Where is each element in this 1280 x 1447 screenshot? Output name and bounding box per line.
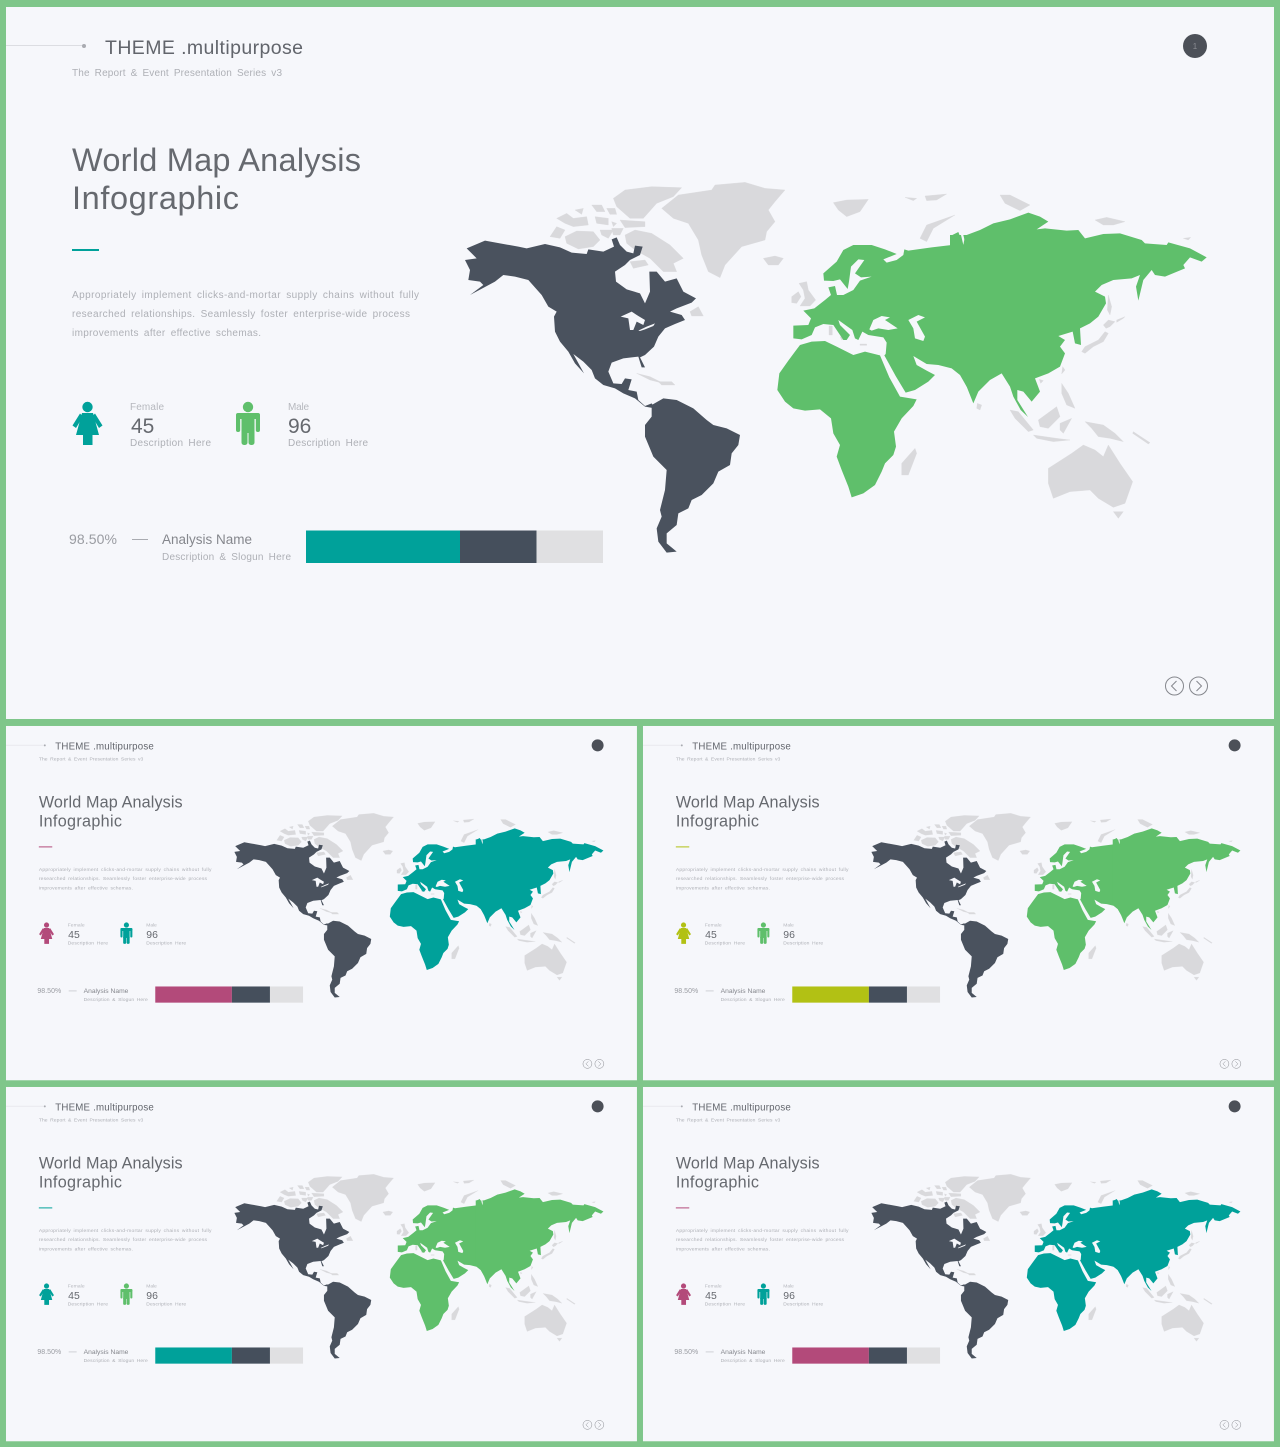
page number badge: [1183, 34, 1207, 58]
header brand: THEME .multipurpose: [692, 741, 791, 752]
navigation arrows: [583, 1420, 604, 1429]
analysis label: Description & Slogun Here: [162, 552, 291, 563]
description paragraph: improvements after effective schemas.: [676, 1247, 770, 1253]
panel: slide variant magenta teal second: [643, 1087, 1274, 1441]
title: [676, 1155, 820, 1191]
description paragraph: improvements after effective schemas.: [676, 886, 770, 892]
stat: female: 45: [68, 1291, 80, 1302]
description paragraph: researched relationships. Seamlessly foster enterprise-wide process: [39, 876, 208, 882]
stat: female: [72, 402, 211, 449]
stat: female: 45: [705, 930, 717, 941]
accent line: [676, 1206, 689, 1209]
accent line: [72, 249, 99, 251]
navigation arrows: [1220, 1059, 1241, 1068]
stacked bar: [155, 1347, 303, 1364]
stat: female: 45: [131, 415, 154, 438]
title: World Map Analysis: [39, 1155, 183, 1173]
title: World Map Analysis: [72, 142, 361, 178]
analysis label: [37, 988, 148, 1003]
stat: male: Description Here: [146, 940, 186, 946]
analysis label: Analysis Name: [721, 1349, 766, 1356]
panel: slide variant teal green: [6, 1087, 637, 1441]
description paragraph: researched relationships. Seamlessly foster enterprise-wide process: [72, 309, 410, 320]
description paragraph: Appropriately implement clicks-and-mortar supply chains without fully: [39, 867, 212, 873]
analysis label: Analysis Name: [84, 988, 129, 995]
stat: male: Description Here: [146, 1301, 186, 1307]
header brand: THEME .multipurpose: [105, 37, 303, 59]
analysis label: 98.50%: [69, 531, 117, 547]
world map: [871, 1174, 1240, 1359]
panel: slide variant magenta teal: [6, 726, 637, 1080]
analysis label: Description & Slogun Here: [84, 1358, 148, 1364]
stat: female: Description Here: [705, 1301, 745, 1307]
analysis label: 98.50%: [674, 988, 698, 995]
stat: male: Male: [288, 402, 309, 413]
stat: female: Female: [130, 402, 164, 413]
header brand: THEME .multipurpose: [55, 1102, 154, 1113]
world map: [465, 182, 1207, 553]
stat: female: 45: [68, 930, 80, 941]
header brand: The Report & Event Presentation Series v3: [72, 68, 282, 79]
analysis label: [37, 1349, 148, 1364]
accent line: [676, 845, 689, 848]
description paragraph: Appropriately implement clicks-and-mortar supply chains without fully: [676, 1228, 849, 1234]
header brand: The Report & Event Presentation Series v3: [676, 756, 781, 762]
panel: slide variant olive green: [643, 726, 1274, 1080]
title: [676, 794, 820, 830]
title: [72, 142, 361, 216]
title: World Map Analysis: [39, 794, 183, 812]
page number badge: 1: [1193, 42, 1198, 51]
stat: male: [236, 402, 368, 449]
navigation arrows: [1166, 677, 1208, 695]
analysis label: Analysis Name: [721, 988, 766, 995]
analysis label: [674, 1349, 785, 1364]
header brand: [643, 741, 791, 762]
description paragraph: improvements after effective schemas.: [39, 1247, 133, 1253]
stat: female: Description Here: [130, 438, 211, 449]
description paragraph: improvements after effective schemas.: [72, 328, 261, 339]
description paragraph: [39, 867, 212, 892]
description paragraph: Appropriately implement clicks-and-mortar supply chains without fully: [39, 1228, 212, 1234]
page number badge: [592, 1100, 604, 1112]
header brand: [6, 37, 303, 79]
stat: male: 96: [783, 1291, 795, 1302]
stat: male: [757, 922, 823, 946]
stat: male: [120, 922, 186, 946]
stat: female: Description Here: [68, 1301, 108, 1307]
stat: male: 96: [288, 415, 311, 438]
stat: female: [39, 922, 108, 946]
stat: female: [676, 922, 745, 946]
header brand: The Report & Event Presentation Series v3: [676, 1117, 781, 1123]
stat: male: [120, 1283, 186, 1307]
description paragraph: Appropriately implement clicks-and-mortar supply chains without fully: [676, 867, 849, 873]
analysis label: [674, 988, 785, 1003]
title: Infographic: [676, 812, 759, 830]
analysis label: 98.50%: [37, 1349, 61, 1356]
description paragraph: improvements after effective schemas.: [39, 886, 133, 892]
stat: female: Female: [68, 1284, 85, 1290]
world map: [234, 1174, 603, 1359]
stat: male: Male: [783, 1284, 794, 1290]
stat: male: 96: [783, 930, 795, 941]
stat: female: [39, 1283, 108, 1307]
analysis label: Description & Slogun Here: [721, 1358, 785, 1364]
header brand: [6, 1102, 154, 1123]
panel: main slide: [6, 7, 1274, 719]
page number badge: [592, 739, 604, 751]
stacked bar: [792, 1347, 940, 1364]
header brand: THEME .multipurpose: [55, 741, 154, 752]
stacked bar: [155, 986, 303, 1003]
title: Infographic: [39, 1173, 122, 1191]
title: Infographic: [72, 180, 239, 216]
stat: female: Female: [705, 1284, 722, 1290]
stat: female: 45: [705, 1291, 717, 1302]
stat: male: [757, 1283, 823, 1307]
description paragraph: [72, 290, 419, 339]
stat: male: 96: [146, 930, 158, 941]
analysis label: Analysis Name: [162, 532, 252, 547]
header brand: [6, 741, 154, 762]
description paragraph: Appropriately implement clicks-and-mortar supply chains without fully: [72, 290, 419, 301]
analysis label: Description & Slogun Here: [84, 997, 148, 1003]
world map: [871, 813, 1240, 998]
description paragraph: researched relationships. Seamlessly foster enterprise-wide process: [676, 876, 845, 882]
stacked bar: [792, 986, 940, 1003]
stat: male: Male: [146, 1284, 157, 1290]
header brand: The Report & Event Presentation Series v3: [39, 756, 144, 762]
header brand: [643, 1102, 791, 1123]
title: World Map Analysis: [676, 794, 820, 812]
accent line: [39, 1206, 52, 1209]
analysis label: 98.50%: [37, 988, 61, 995]
stat: male: Male: [783, 923, 794, 929]
stat: male: Description Here: [783, 1301, 823, 1307]
analysis label: 98.50%: [674, 1349, 698, 1356]
page number badge: [1229, 1100, 1241, 1112]
description paragraph: researched relationships. Seamlessly foster enterprise-wide process: [676, 1237, 845, 1243]
analysis label: [69, 531, 291, 563]
title: [39, 1155, 183, 1191]
stat: female: [676, 1283, 745, 1307]
page number badge: [1229, 739, 1241, 751]
title: Infographic: [39, 812, 122, 830]
title: World Map Analysis: [676, 1155, 820, 1173]
stacked bar: [306, 530, 603, 563]
accent line: [39, 845, 52, 848]
stat: female: Description Here: [705, 940, 745, 946]
stat: male: Description Here: [783, 940, 823, 946]
stat: male: 96: [146, 1291, 158, 1302]
stat: female: Female: [705, 923, 722, 929]
analysis label: Description & Slogun Here: [721, 997, 785, 1003]
stat: male: Description Here: [288, 438, 368, 449]
description paragraph: [676, 867, 849, 892]
navigation arrows: [1220, 1420, 1241, 1429]
stat: female: Description Here: [68, 940, 108, 946]
header brand: THEME .multipurpose: [692, 1102, 791, 1113]
title: [39, 794, 183, 830]
navigation arrows: [583, 1059, 604, 1068]
world map: [234, 813, 603, 998]
stat: male: Male: [146, 923, 157, 929]
description paragraph: researched relationships. Seamlessly foster enterprise-wide process: [39, 1237, 208, 1243]
stat: female: Female: [68, 923, 85, 929]
title: Infographic: [676, 1173, 759, 1191]
description paragraph: [39, 1228, 212, 1253]
header brand: The Report & Event Presentation Series v3: [39, 1117, 144, 1123]
description paragraph: [676, 1228, 849, 1253]
analysis label: Analysis Name: [84, 1349, 129, 1356]
